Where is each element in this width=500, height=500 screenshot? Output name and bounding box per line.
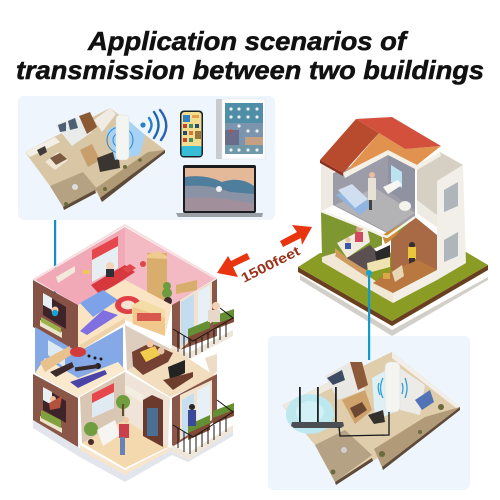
wifi glow around tube (378, 378, 407, 398)
icon: white outdoor tube (385, 362, 400, 412)
balcony railing lower (173, 400, 233, 454)
floor boards and front walls (322, 252, 437, 303)
title (16, 26, 484, 85)
arrow: pointing to right house (280, 225, 312, 247)
floor plan bottom-right (282, 352, 460, 485)
cable from router to tube (339, 412, 389, 436)
floor plan top-left (25, 108, 165, 210)
ground floor right brown wall and balcony (172, 374, 234, 460)
pink attic room (33, 225, 217, 305)
cable connection dot right (366, 270, 372, 276)
roof (320, 117, 441, 178)
ground platform (298, 252, 488, 336)
title: transmission between two buildings (16, 55, 484, 85)
ground floor left brown wall (33, 374, 78, 447)
nursery floor and bunk bed (78, 280, 172, 352)
wifi glow around tube (107, 120, 145, 160)
cable connection dot left (52, 310, 58, 316)
right house (298, 117, 488, 336)
blue cable left (54, 220, 56, 312)
icon: laptop (176, 165, 263, 217)
blue cable right (368, 273, 370, 360)
arrow: pointing to left building (217, 253, 250, 277)
distance label: 1500feet (239, 243, 303, 286)
left apartment building (33, 225, 234, 482)
bathroom storey (333, 153, 415, 233)
icon: router (291, 387, 344, 428)
floor shadow (33, 420, 233, 482)
brown wall with balcony upper right (172, 279, 234, 360)
title: Application scenarios of (87, 26, 408, 56)
panel: indoor coverage with devices (18, 96, 275, 220)
blue middle room (35, 327, 125, 397)
icon: tablet (216, 99, 265, 159)
icon: smartphone (180, 110, 203, 158)
balcony railing upper (173, 308, 233, 358)
ground floor centre room (80, 372, 170, 475)
brown wall and window upper left (33, 280, 78, 352)
living room right middle (125, 325, 217, 397)
outer walls (321, 152, 466, 280)
panel: router and tube installation (268, 336, 470, 490)
icon: white outdoor tube (116, 115, 129, 160)
living storey (321, 212, 437, 273)
icon: wifi waves (140, 110, 166, 140)
floor divider (321, 211, 415, 237)
